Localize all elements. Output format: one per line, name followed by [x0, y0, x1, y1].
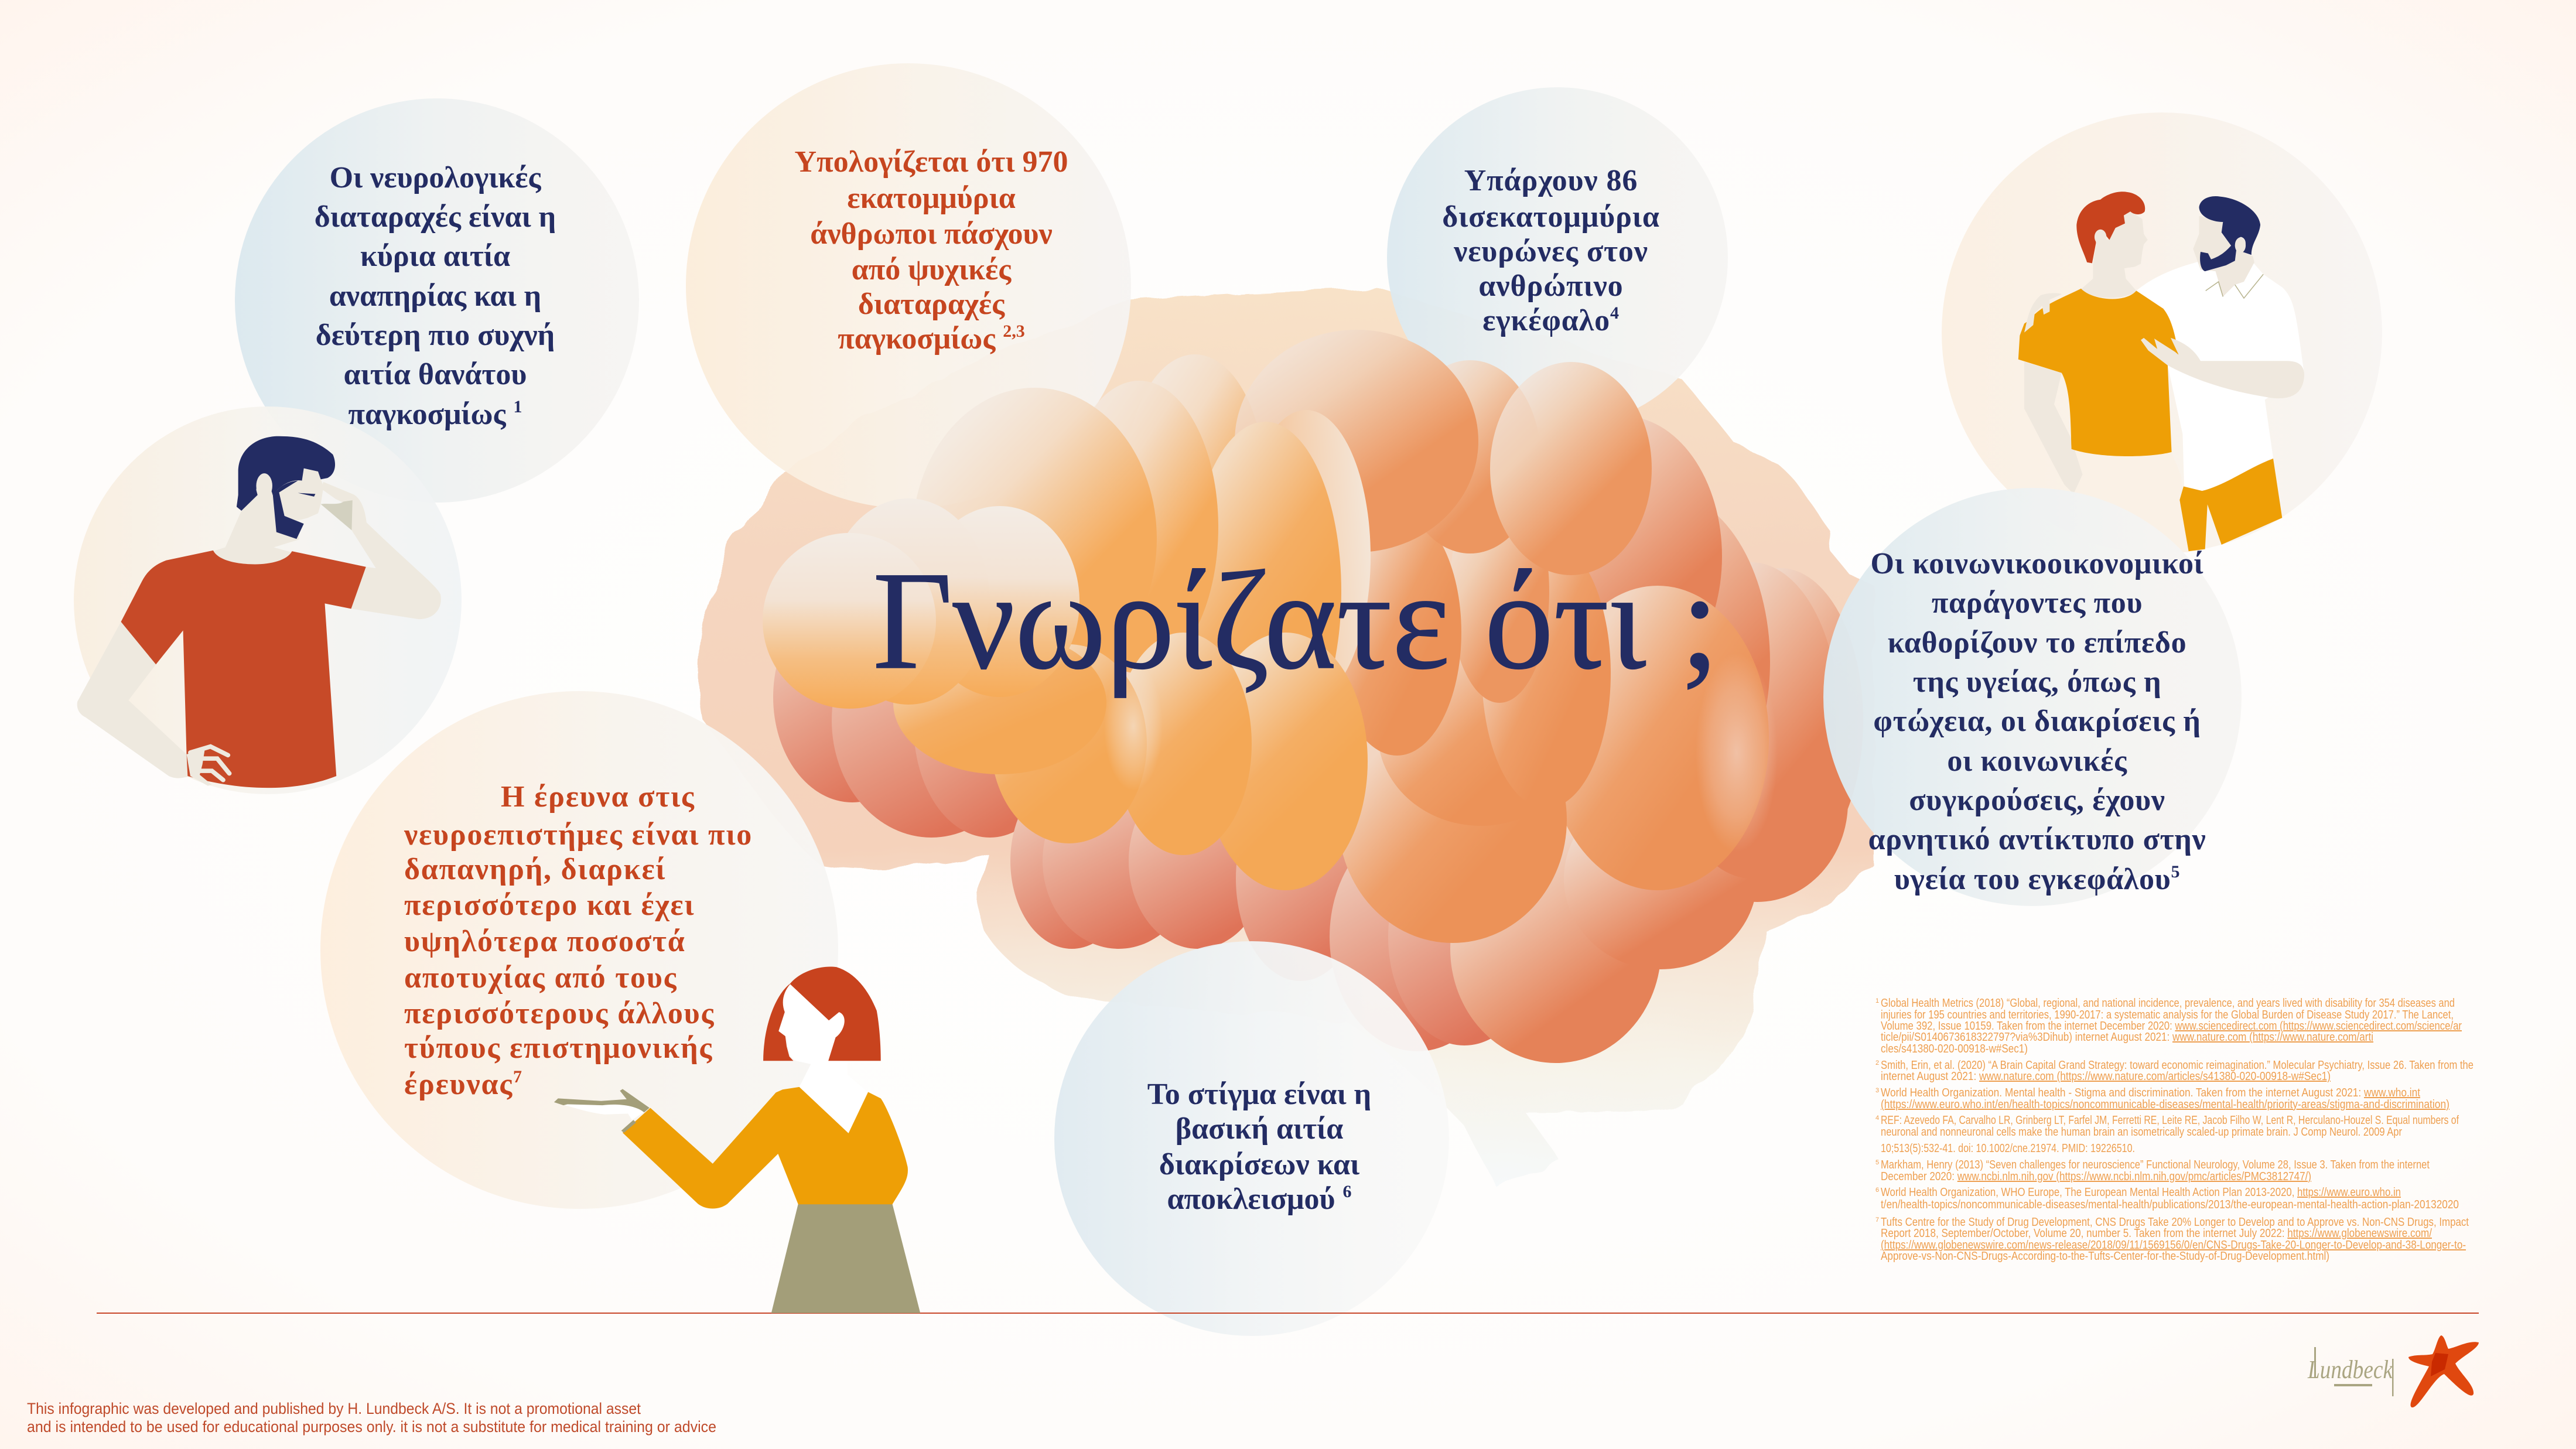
research text: Η έρευνα στις	[501, 780, 695, 814]
neurons text: εγκέφαλο	[1482, 303, 1620, 337]
research text: έρευνας	[404, 1067, 523, 1101]
socioeconomic text: οι κοινωνικές	[1947, 744, 2127, 778]
references: Global Health Metrics (2018) “Global, regional, and national incidence, prevalence, and years lived with disability for 354 diseases and	[1881, 997, 2455, 1010]
socioeconomic text: της υγείας, όπως η	[1913, 665, 2161, 699]
references: injuries for 195 countries and territories, 1990-2017: a systematic analysis for the Global Burden of Disease Study 2017.” The Lancet,	[1881, 1009, 2454, 1021]
research text: τύπους επιστημονικής	[404, 1031, 713, 1065]
disclaimer	[27, 1400, 716, 1436]
stat text: διαταραχές	[858, 288, 1005, 321]
neurological disorders text: Οι νευρολογικές	[330, 161, 541, 194]
disclaimer: and is intended to be used for educational purposes only. it is not a substitute for medical training or advice	[27, 1418, 716, 1436]
brain lobes	[763, 330, 1863, 1063]
stat text: από ψυχικές	[852, 253, 1012, 286]
panel: socioeconomic factors	[1823, 488, 2242, 906]
panel: two men circle	[1942, 112, 2382, 553]
references: December 2020: www.ncbi.nlm.nih.gov (https://www.ncbi.nlm.nih.gov/pmc/articles/PMC3812747/)	[1881, 1170, 2311, 1183]
stat text: 2,3	[1003, 322, 1025, 341]
brain watercolour halo	[698, 289, 1874, 1190]
references: 6	[1875, 1187, 1879, 1194]
references: 3	[1875, 1087, 1879, 1094]
panel: stat 970 million	[686, 63, 1131, 508]
references: Report 2018, September/October, Volume 20, number 5. Taken from the internet July 2022: https://www.globenewswire.com/	[1881, 1227, 2432, 1240]
references: (https://www.euro.who.int/en/health-topics/noncommunicable-diseases/mental-health/priority-areas/stigma-and-discrimination)	[1881, 1098, 2449, 1111]
research text: περισσότερους άλλους	[404, 997, 715, 1030]
panel: 86 billion neurons	[1387, 87, 1728, 428]
neurological disorders text: δεύτερη πιο συχνή	[316, 319, 555, 352]
references: Tufts Centre for the Study of Drug Development, CNS Drugs Take 20% Longer to Develop and to Approve vs. Non-CNS Drugs, Impact	[1881, 1216, 2469, 1229]
disclaimer: This infographic was developed and published by H. Lundbeck A/S. It is not a promotional asset	[27, 1400, 641, 1417]
icon: thinking man	[77, 436, 441, 788]
references: 10;513(5):532-41. doi: 10.1002/cne.21974. PMID: 19226510.	[1881, 1142, 2135, 1155]
research text: περισσότερο και έχει	[404, 888, 695, 922]
stat text: εκατομμύρια	[847, 182, 1016, 215]
references: 2	[1875, 1060, 1879, 1067]
man text last line: 1	[514, 397, 522, 416]
research text: υψηλότερα ποσοστά	[404, 925, 686, 958]
logo: Lundbeck wordmark: Lundbeck	[2307, 1355, 2393, 1384]
stigma text: αποκλεισμού	[1167, 1182, 1352, 1216]
references: World Health Organization, WHO Europe, The European Mental Health Action Plan 2013-2020, https://www.euro.who.in	[1881, 1186, 2401, 1199]
research text: αποτυχίας από τους	[404, 961, 677, 995]
title: Γνωρίζατε ότι ;	[873, 542, 1719, 698]
logo: Lundbeck wordmark	[2307, 1347, 2393, 1396]
research text: 7	[513, 1067, 523, 1086]
neurons text: 4	[1610, 303, 1620, 323]
socioeconomic text: 5	[2171, 862, 2180, 881]
research text: δαπανηρή, διαρκεί	[404, 853, 666, 886]
references: 4	[1875, 1115, 1879, 1122]
stigma text: Το στίγμα είναι η	[1147, 1078, 1371, 1111]
references: Smith, Erin, et al. (2020) “A Brain Capital Grand Strategy: toward economic reimagination.” Molecular Psychiatry, Issue 26. Taken from the	[1881, 1059, 2473, 1072]
neurological disorders text: αναπηρίας και η	[329, 279, 541, 313]
socioeconomic text: καθορίζουν το επίπεδο	[1888, 626, 2186, 659]
references: internet August 2021: www.nature.com (https://www.nature.com/articles/s41380-020-00918-w#Sec1)	[1881, 1070, 2331, 1083]
panel: neuroscience research	[320, 691, 838, 1209]
references: 5	[1875, 1159, 1879, 1166]
neurons text: δισεκατομμύρια	[1442, 200, 1660, 234]
references: neuronal and nonneuronal cells make the human brain an isometrically scaled-up primate brain. J Comp Neurol. 2009 Apr	[1881, 1126, 2402, 1139]
panel: man with hand on nose	[74, 397, 522, 794]
man text last line: παγκοσμίως	[348, 398, 506, 431]
panel: stigma	[1054, 941, 1449, 1336]
baseline rule	[97, 1313, 2479, 1314]
icon: two men talking	[2018, 192, 2304, 553]
stat text: παγκοσμίως	[838, 322, 1025, 356]
stat text: άνθρωποι πάσχουν	[810, 217, 1053, 251]
references: Markham, Henry (2013) “Seven challenges for neuroscience” Functional Neurology, Volume 28, Issue 3. Taken from the internet	[1881, 1158, 2430, 1171]
stigma text: διακρίσεων και	[1159, 1148, 1359, 1181]
socioeconomic text: συγκρούσεις, έχουν	[1909, 784, 2165, 817]
references: 1	[1875, 997, 1879, 1004]
neurological disorders text: κύρια αιτία	[360, 240, 510, 273]
references: 7	[1875, 1216, 1879, 1224]
stigma text: βασική αιτία	[1176, 1112, 1343, 1146]
socioeconomic text: φτώχεια, οι διακρίσεις ή	[1873, 705, 2201, 738]
icon: woman presenting	[554, 966, 920, 1313]
neurological disorders text: αιτία θανάτου	[344, 358, 527, 391]
neurological disorders text: διαταραχές είναι η	[315, 200, 556, 234]
neurons text: νευρώνες στον	[1453, 235, 1648, 268]
references: World Health Organization. Mental health - Stigma and discrimination. Taken from the internet August 2021: www.who.int	[1881, 1086, 2420, 1099]
neurons text: ανθρώπινο	[1478, 269, 1624, 303]
references: t/en/health-topics/noncommunicable-diseases/mental-health/publications/2013/the-european-mental-health-action-plan-20132020	[1881, 1198, 2459, 1211]
socioeconomic text: Οι κοινωνικοοικονομικοί	[1871, 547, 2203, 580]
references: cles/s41380-020-00918-w#Sec1)	[1881, 1043, 2028, 1055]
references	[1875, 997, 2473, 1263]
references: Volume 392, Issue 10159. Taken from the internet December 2020: www.sciencedirect.com (https://www.sciencedirect.com/science/ar	[1881, 1020, 2462, 1033]
panel: neurological disorders circle	[235, 98, 639, 503]
research text: νευροεπιστήμες είναι πιο	[404, 818, 753, 852]
references: ticle/pii/S0140673618322797?via%3Dihub) internet August 2021: www.nature.com (https://www.nature.com/arti	[1881, 1031, 2373, 1044]
neurons text: Υπάρχουν 86	[1464, 164, 1638, 197]
socioeconomic text: υγεία του εγκεφάλου	[1894, 862, 2180, 896]
stigma text: 6	[1343, 1182, 1352, 1201]
stat text: Υπολογίζεται ότι 970	[795, 145, 1068, 179]
logo: starfish	[2408, 1335, 2479, 1407]
references: Approve-vs-Non-CNS-Drugs-According-to-the-Tufts-Center-for-the-Study-of-Drug-Development.html)	[1881, 1250, 2329, 1263]
references: (https://www.globenewswire.com/news-release/2018/09/11/1569156/0/en/CNS-Drugs-Take-20-Longer-to-Develop-and-38-Longer-to-	[1881, 1239, 2466, 1252]
socioeconomic text: αρνητικό αντίκτυπο στην	[1868, 823, 2206, 856]
socioeconomic text: παράγοντες που	[1932, 586, 2143, 620]
